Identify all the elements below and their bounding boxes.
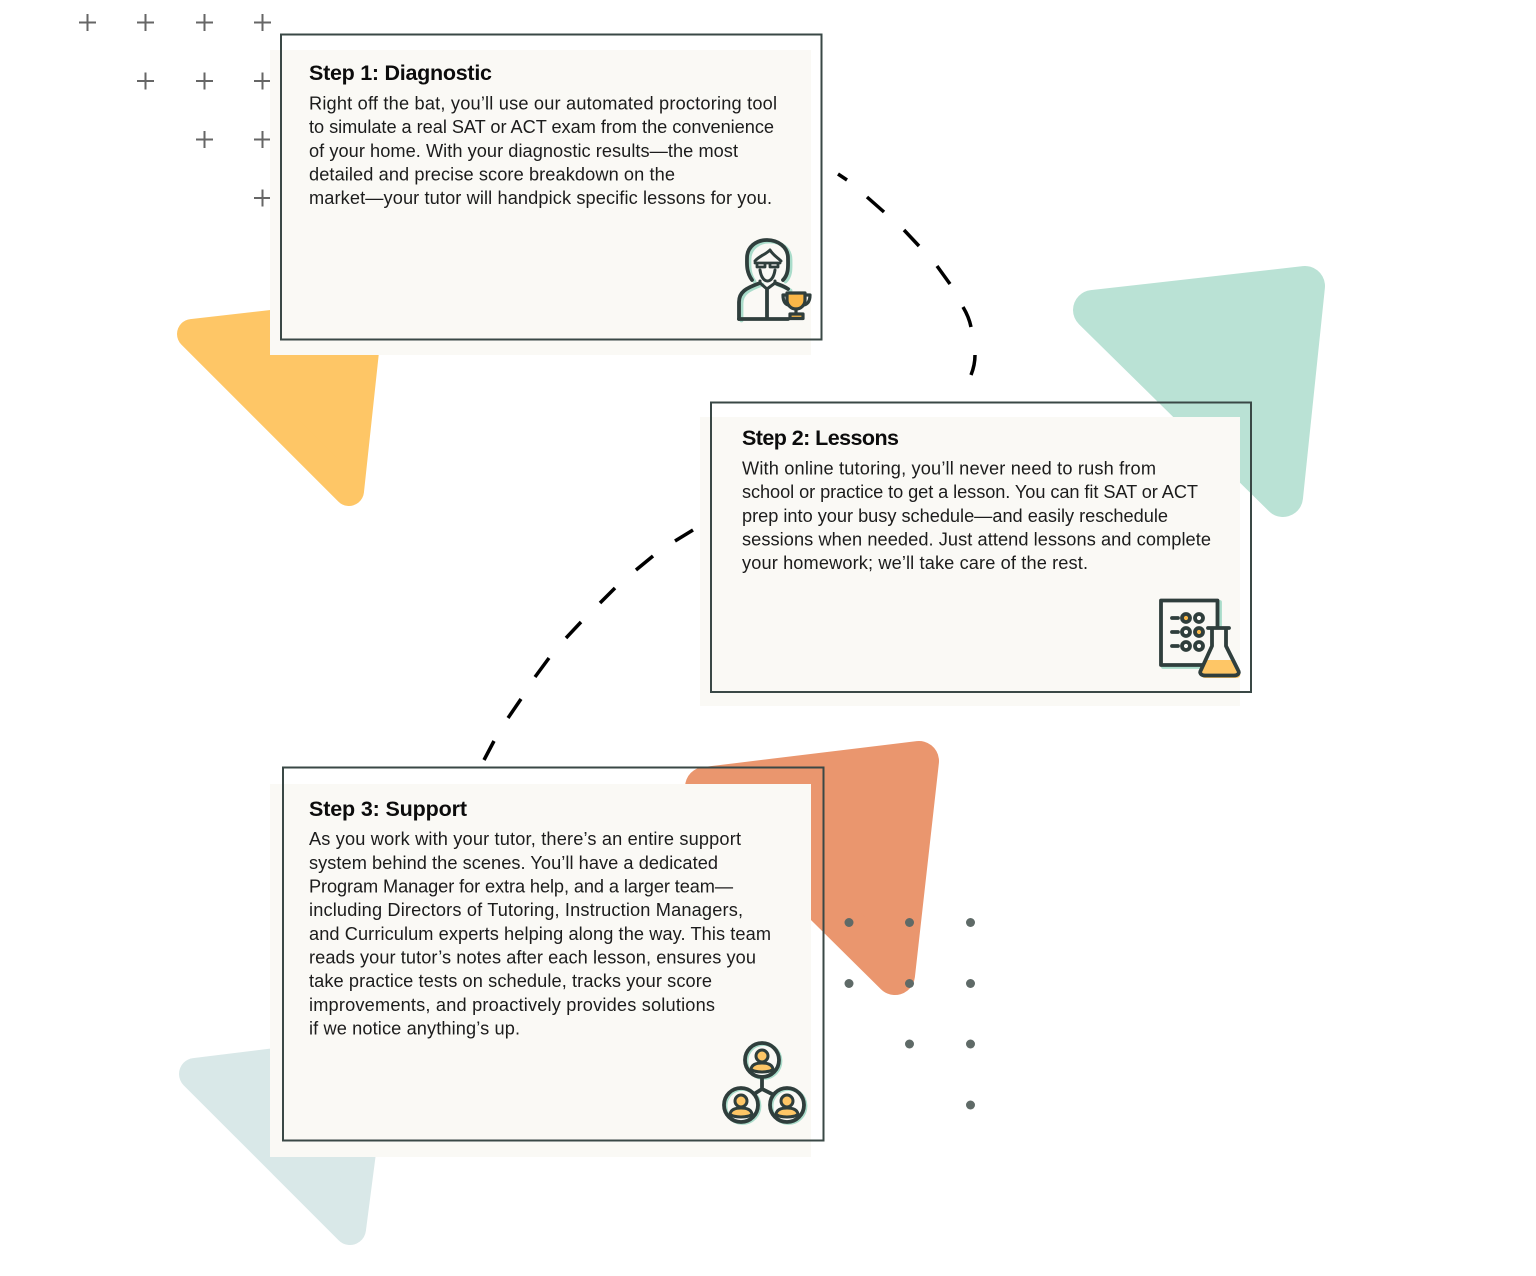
orange triangle [705,761,919,975]
text block: step 2 body: school or practice to get a lesson. You can fit SAT or ACT [742,482,1198,502]
text block: step 1 body: to simulate a real SAT or ACT exam from the convenience [309,117,774,137]
panel: step 1 diagnostic [270,34,822,355]
text block: step 2 body: your homework; we’ll take care of the rest. [742,553,1088,573]
yellow triangle [192,314,368,491]
text block: step 2 body: prep into your busy schedule—and easily reschedule [742,506,1168,526]
text block: step 2 body: sessions when needed. Just attend lessons and complete [742,530,1211,550]
text block: step 3 body: Program Manager for extra help, and a larger team— [309,876,734,896]
icon: test sheet with flask [1161,600,1240,678]
text block: step 1 body: Right off the bat, you’ll use our automated proctoring tool [309,94,777,114]
text block: step 1 body: market—your tutor will handpick specific lessons for you. [309,188,772,208]
heading: step 1: Step 1: Diagnostic [309,61,492,85]
decorative plus grid [79,14,271,206]
text block: step 2 body [742,458,1211,573]
text block: step 1 body: of your home. With your diagnostic results—the most [309,141,738,161]
text block: step 1 body: detailed and precise score breakdown on the [309,164,675,184]
text block: step 3 body: system behind the scenes. You’ll have a dedicated [309,853,718,873]
pale blue triangle [195,1052,373,1229]
text block: step 2 body: With online tutoring, you’ll never need to rush from [742,458,1156,478]
dashed arrow path: step 1 to step 2 [838,174,975,375]
dashed arrow path: step 2 to step 3 [484,530,693,760]
text block: step 3 body: including Directors of Tutoring, Instruction Managers, [309,900,743,920]
text block: step 3 body: if we notice anything’s up. [309,1018,520,1038]
heading: step 3: Step 3: Support [309,797,467,821]
text block: step 3 body: and Curriculum experts helping along the way. This team [309,924,771,944]
icon: person with trophy [739,240,810,320]
text block: step 3 body: As you work with your tutor, there’s an entire support [309,829,741,849]
text block: step 3 body: improvements, and proactively provides solutions [309,995,715,1015]
text block: step 1 body [309,94,777,208]
text block: step 3 body [309,829,771,1038]
teal triangle [1093,286,1305,497]
panel: step 2 lessons [700,402,1251,706]
decorative dot grid [844,918,975,1110]
text block: step 3 body: reads your tutor’s notes after each lesson, ensures you [309,948,756,968]
icon: support team network [724,1043,806,1123]
heading: step 2: Step 2: Lessons [742,426,899,450]
panel: step 3 support [270,768,824,1157]
text block: step 3 body: take practice tests on schedule, tracks your score [309,971,712,991]
